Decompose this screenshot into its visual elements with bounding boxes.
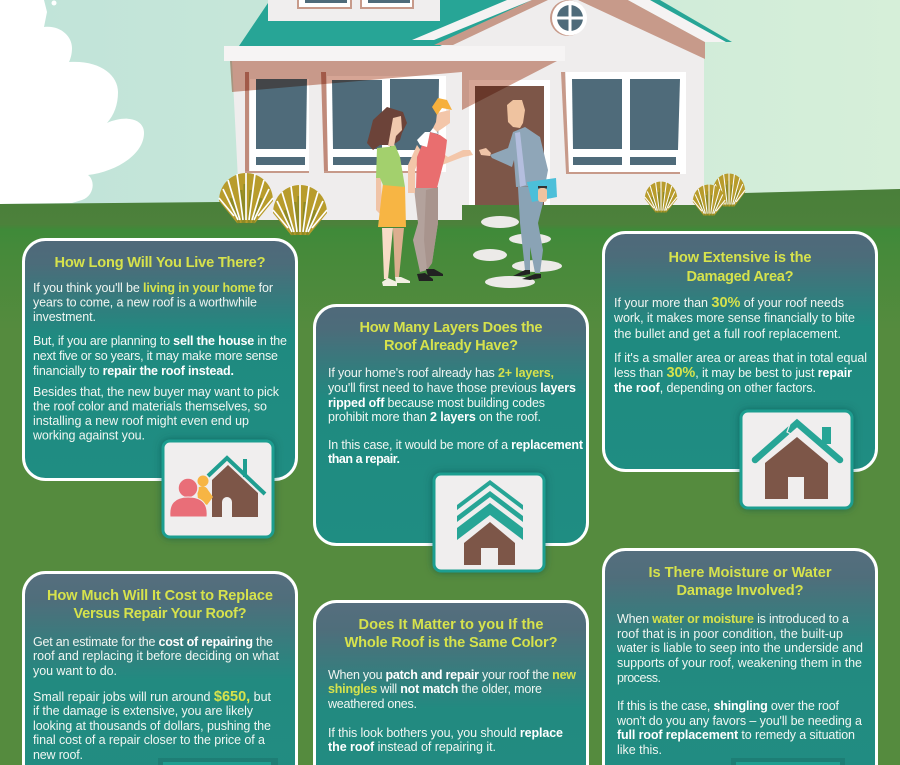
icon: layered roof [434,474,544,571]
body text: new roof. [33,748,83,762]
frieze [230,61,557,110]
panel: how long will you live there [24,240,296,537]
left window [245,72,309,173]
ground [0,189,900,765]
woman [367,107,410,286]
heading: How Many Layers Does the [360,320,542,336]
main walls [232,61,462,220]
heading [344,617,558,651]
body text: looking at thousands of dollars, pushing the [33,719,271,733]
heading: How Long Will You Live There? [54,255,266,271]
cloud [0,0,144,204]
eave [224,46,565,61]
body text: If this look bothers you, you should replace [328,726,563,740]
right window [561,72,686,174]
stepping stones [473,216,562,288]
panel: how many layers [314,306,588,571]
body text: installing a new roof might even end up [33,414,249,428]
body text: If it's a smaller area or areas that in total equal [614,351,867,365]
body text [613,295,867,395]
body text: final cost of a repair closer to the price of a [33,733,265,747]
body text: supports of your roof, weakening them in the [617,656,862,670]
heading: Does It Matter to you If the [358,617,544,633]
body text: weathered ones. [327,697,417,711]
panel: how much will it cost [24,572,296,765]
cloud puff [52,0,56,6]
sky background [0,0,900,215]
icon: damaged roof [741,411,852,508]
heading [360,320,542,354]
bushes [219,173,745,235]
body text [327,668,576,754]
heading: Roof Already Have? [384,338,518,354]
body text: than a repair. [328,452,400,466]
heading: How Extensive is the [668,250,812,266]
body text: the bullet and get a full roof replacement. [614,327,841,341]
body text: the roof, depending on other factors. [614,381,816,395]
body text [616,612,863,757]
body text: the roof instead of repairing it. [328,740,496,754]
body text: Get an estimate for the cost of repairing the [33,635,273,649]
body text: roof and replacing it before deciding on what [33,649,280,663]
heading: Whole Roof is the Same Color? [344,635,558,651]
body text: financially to repair the roof instead. [33,364,234,378]
body text: But, if you are planning to sell the house in the [33,334,287,348]
body text: process. [617,671,661,685]
body text: Besides that, the new buyer may want to pick [33,385,280,399]
heading: Damaged Area? [686,269,794,285]
panel: moisture or water damage [604,550,876,765]
body text: the roof color and materials themselves, so [33,400,267,414]
body text [33,635,280,762]
middle window [321,72,446,173]
body text: full roof replacement to remedy a situation [617,728,855,742]
body text [328,366,584,466]
body text: Small repair jobs will run around $650, but [33,689,272,705]
heading: Damage Involved? [676,583,804,599]
heading [648,565,832,599]
body text: In this case, it would be more of a replacement [328,438,584,452]
body text: investment. [33,310,96,324]
body text: you'll first need to have those previous layers [328,381,576,395]
body text: next five or so years, it may make more sense [33,349,278,363]
body text: shingles will not match the older, more [328,682,542,696]
heading: How Much Will It Cost to Replace [47,588,273,604]
gable trim [412,0,532,40]
body text: working against you. [32,428,145,442]
heading [668,250,812,285]
body text: If your more than 30% of your roof needs [614,295,844,311]
body text: roof that is in poor condition, the built-up [617,627,843,641]
heading: Is There Moisture or Water [648,565,832,581]
icon box: water, top edge [731,758,845,765]
body text: When water or moisture is introduced to a [617,612,849,626]
body text: if the damage is extensive, you are likely [33,704,254,718]
body text: water is liable to seep into the underside and [616,641,863,655]
panel: how extensive is the damaged area [604,232,876,508]
body text: prohibit more than 2 layers on the roof. [328,410,541,424]
body text: less than 30%, it may be best to just repair [614,365,852,381]
heading: Versus Repair Your Roof? [74,606,247,622]
body text: you want to do. [33,664,117,678]
heading [47,588,273,622]
body text: If your home's roof already has 2+ layers, [328,366,554,380]
body text: If this is the case, shingling over the roof [617,699,840,713]
round attic window [550,0,587,36]
door [469,80,550,205]
body text [32,281,287,442]
dormer [268,0,440,21]
icon box: cost, top edge [158,758,278,765]
body text: If you think you'll be living in your home for [33,281,273,295]
body text: When you patch and repair your roof the new [328,668,576,682]
man [408,98,473,281]
body text: years to come, a new roof is a worthwhile [33,296,257,310]
panel: does it matter if same color [314,602,588,765]
real estate agent [479,100,557,280]
body text: ripped off because most building codes [328,396,545,410]
icon: people and house [163,441,273,537]
body text: like this. [617,743,662,757]
body text: work, it makes more sense financially to bite [613,311,855,325]
roof [239,0,540,46]
house [224,0,732,220]
body text: won't do you any favors – you'll be needing a [616,714,862,728]
